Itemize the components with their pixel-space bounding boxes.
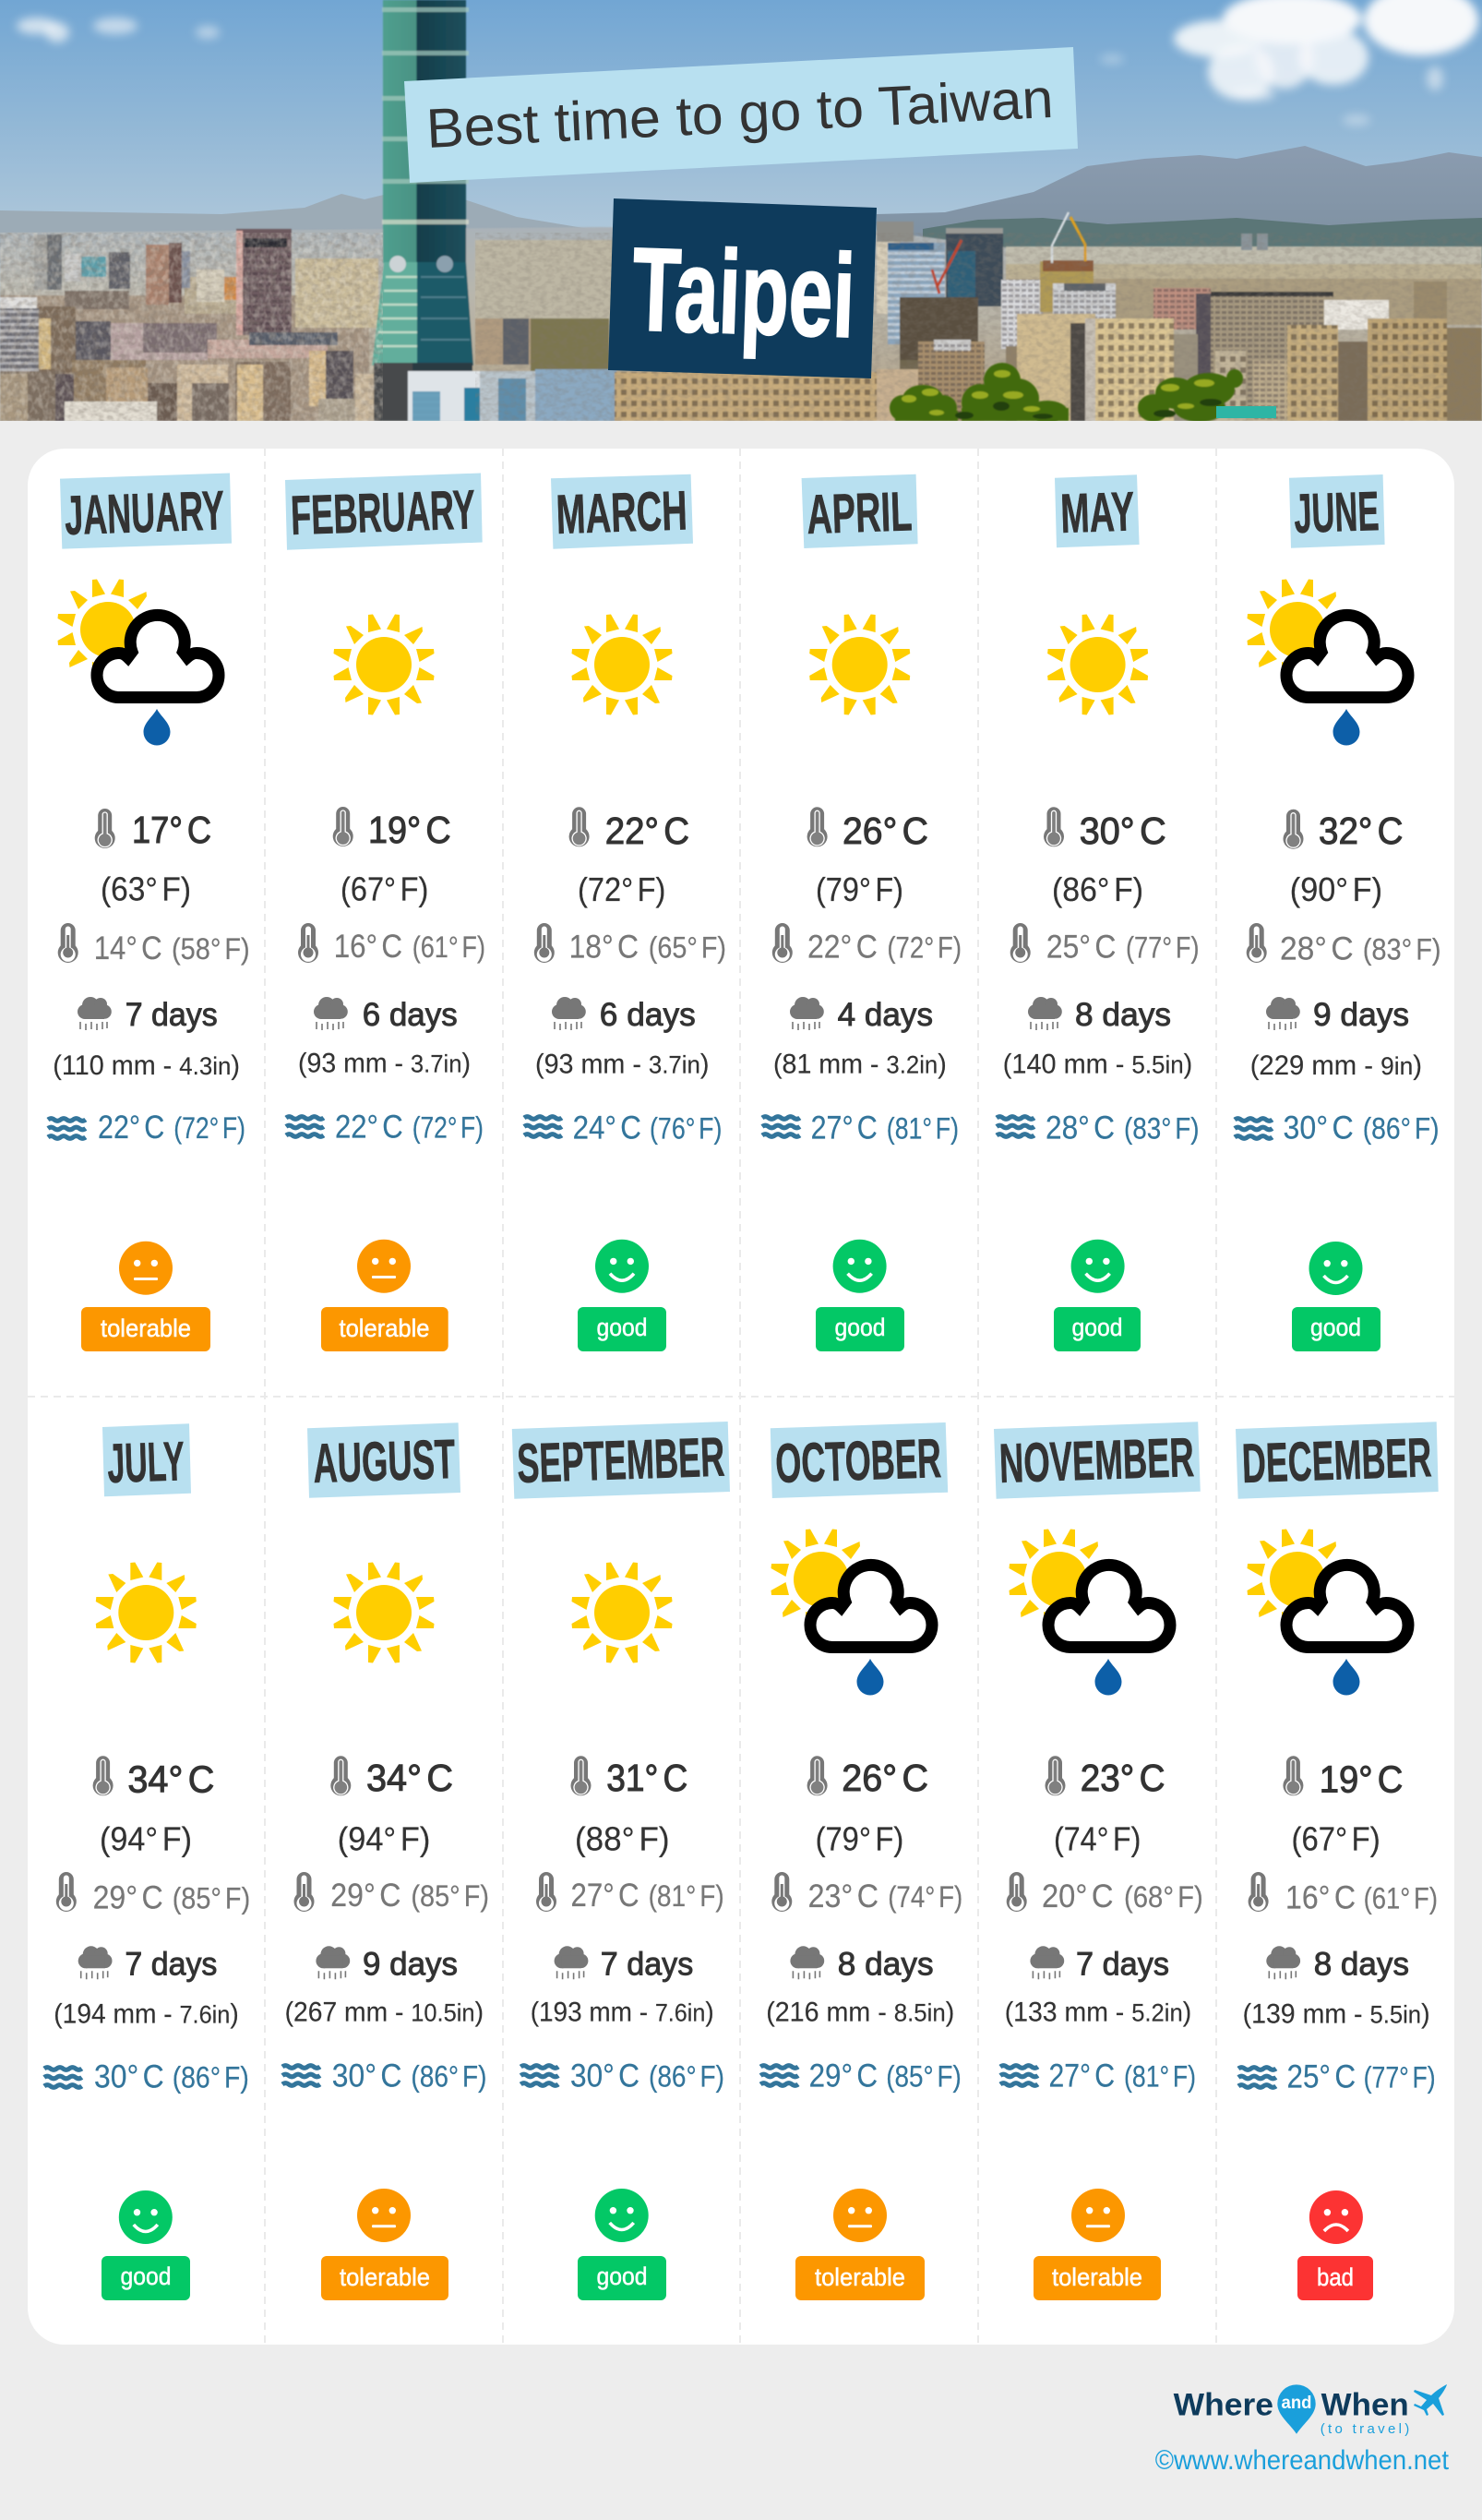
sea temperature: (86° F) (649, 2060, 724, 2094)
sea temperature: 27° C (811, 1110, 878, 1146)
logo: Where and When (to travel): Where (1174, 2388, 1273, 2423)
rain days: 8 days (1075, 997, 1171, 1033)
sea temperature: 22° C (335, 1110, 403, 1146)
rainfall: (216 mm - 8.5in) (766, 1998, 954, 2028)
low temperature: (58° F) (172, 932, 250, 966)
month label: March (551, 474, 693, 549)
low temperature (771, 1872, 962, 1914)
logo: Where and When (to travel): and (1281, 2394, 1312, 2413)
low temperature (1007, 1872, 1203, 1914)
banner: Taipei (608, 198, 877, 378)
cell: September (512, 1422, 730, 2300)
month label: May (1055, 474, 1140, 547)
sea temperature (286, 1110, 484, 1146)
month label: August (307, 1422, 460, 1498)
low temperature (1010, 923, 1200, 965)
high temperature: 26° C (842, 1757, 928, 1799)
sea temperature (524, 1110, 722, 1146)
high temperature: 26° C (843, 810, 928, 852)
panel: monthly weather card (28, 449, 1454, 2345)
high temperature in Fahrenheit: (67° F) (1292, 1819, 1380, 1857)
rainfall: (110 mm - 4.3in) (53, 1050, 240, 1081)
icon: sun (572, 615, 672, 714)
rain days (1030, 1946, 1169, 1982)
cell: June (1235, 474, 1441, 1351)
rain days (1028, 997, 1171, 1033)
high temperature (569, 807, 689, 852)
high temperature in Fahrenheit: (72° F) (578, 870, 665, 908)
icon: sun (572, 1562, 672, 1663)
sea temperature: (76° F) (650, 1111, 722, 1145)
rain days (314, 997, 458, 1033)
high temperature: 34° C (366, 1757, 453, 1799)
high temperature in Fahrenheit: (94° F) (100, 1819, 192, 1857)
rainfall: (229 mm - 9in) (1250, 1050, 1422, 1081)
high temperature (1045, 1756, 1165, 1799)
sea temperature (1000, 2058, 1196, 2094)
cell: August (282, 1422, 489, 2300)
high temperature (330, 1756, 453, 1799)
rain days: 7 days (125, 1946, 217, 1982)
low temperature: 22° C (807, 929, 878, 965)
sea temperature (762, 1110, 959, 1146)
rainfall: (93 mm - 3.7in) (535, 1049, 709, 1079)
month label: May: MAY (1059, 480, 1135, 545)
rain days: 9 days (1313, 997, 1409, 1033)
low temperature (772, 923, 962, 965)
high temperature (95, 809, 211, 851)
rating: tolerable: tolerable (1052, 2263, 1142, 2291)
cell: March (524, 474, 726, 1351)
copyright url: ©www.whereandwhen.net (1155, 2445, 1450, 2476)
rain days: 7 days (125, 997, 218, 1033)
low temperature: 28° C (1280, 930, 1354, 966)
rating: good: good (596, 2262, 648, 2290)
sea temperature: (72° F) (412, 1111, 484, 1145)
rating: good: good (1072, 1314, 1122, 1341)
rating: tolerable: tolerable (101, 1314, 191, 1342)
low temperature: (77° F) (1126, 930, 1200, 964)
icon: map pin (1277, 2384, 1316, 2434)
low temperature (536, 1872, 724, 1914)
banner: Taipei: Taipei (630, 223, 857, 363)
sea temperature: 24° C (573, 1110, 641, 1146)
rain days: 9 days (363, 1946, 458, 1982)
month label: November (994, 1422, 1201, 1499)
rainfall: (193 mm - 7.6in) (531, 1998, 714, 2028)
rain days (1266, 1946, 1409, 1982)
low temperature: 27° C (570, 1878, 639, 1914)
rain days (790, 1946, 934, 1982)
rainfall: (93 mm - 3.7in) (298, 1049, 471, 1079)
cell: February (285, 473, 485, 1351)
icon: sun and rain cloud (1248, 580, 1408, 746)
rain days: 8 days (1314, 1946, 1409, 1982)
sea temperature: (72° F) (173, 1111, 245, 1145)
rating: good (1054, 1240, 1141, 1351)
low temperature: 25° C (1046, 929, 1116, 965)
high temperature: 22° C (605, 810, 689, 852)
month label: January: JANUARY (64, 479, 225, 546)
icon: sun (334, 615, 434, 714)
high temperature (1283, 1756, 1403, 1801)
low temperature (298, 923, 485, 965)
rating: good: good (596, 1314, 648, 1341)
low temperature (56, 1872, 250, 1915)
icon: sun (334, 1562, 434, 1663)
rain days (1266, 997, 1409, 1033)
rating: good (578, 2189, 666, 2300)
sea temperature: (86° F) (1363, 1111, 1440, 1145)
sea temperature (282, 2058, 487, 2094)
rain days (316, 1946, 458, 1982)
cell: April (762, 474, 962, 1351)
rain days: 7 days (601, 1946, 693, 1982)
month label: September (512, 1422, 730, 1499)
cell: July (44, 1423, 250, 2300)
month label: June: JUNE (1293, 480, 1380, 545)
sea temperature: (81° F) (887, 1111, 959, 1145)
month label: April (802, 474, 918, 548)
cell: December (1236, 1422, 1439, 2300)
sea temperature: 27° C (1048, 2058, 1115, 2094)
month label: January (60, 473, 232, 549)
high temperature: 34° C (127, 1758, 214, 1801)
rating: tolerable (81, 1242, 210, 1351)
rating: good: good (1310, 1314, 1361, 1341)
rain days (78, 1946, 217, 1982)
sea temperature: (81° F) (1124, 2060, 1196, 2094)
month label: October: OCTOBER (774, 1427, 942, 1494)
sea temperature: 29° C (809, 2058, 878, 2094)
rain days: 7 days (1076, 1946, 1169, 1982)
low temperature: 29° C (330, 1878, 400, 1914)
high temperature in Fahrenheit: (86° F) (1052, 870, 1143, 908)
high temperature: 30° C (1080, 810, 1166, 852)
rating: good: good (834, 1314, 886, 1341)
low temperature: 14° C (94, 930, 162, 966)
low temperature: (61° F) (1364, 1882, 1438, 1915)
low temperature: (85° F) (411, 1879, 489, 1913)
rating: tolerable (795, 2189, 925, 2300)
high temperature in Fahrenheit: (67° F) (341, 870, 428, 908)
month label: July: JULY (106, 1430, 185, 1494)
trees (890, 363, 1243, 423)
low temperature: 16° C (334, 929, 402, 965)
icon: plane (1414, 2384, 1447, 2416)
high temperature in Fahrenheit: (88° F) (575, 1819, 670, 1857)
low temperature: 23° C (808, 1878, 878, 1914)
month label: September: SEPTEMBER (516, 1426, 725, 1494)
sea temperature (1238, 2059, 1436, 2095)
rain days: 6 days (600, 997, 696, 1033)
city grain (0, 233, 383, 421)
high temperature (93, 1756, 214, 1801)
sea temperature: 30° C (1283, 1110, 1354, 1146)
high temperature (333, 807, 451, 851)
logo: Where and When (to travel): (to travel) (1321, 2421, 1409, 2437)
hero photo: Taipei skyline (0, 0, 1482, 423)
rating: good (578, 1240, 666, 1351)
month label: June (1289, 474, 1385, 548)
rainfall: (133 mm - 5.2in) (1005, 1998, 1191, 2028)
rating: good: good (120, 2262, 172, 2290)
rainfall: (267 mm - 10.5in) (285, 1998, 484, 2028)
month label: November: NOVEMBER (998, 1426, 1195, 1494)
low temperature: (72° F) (887, 930, 962, 964)
icon: sun and rain cloud (771, 1529, 932, 1695)
sea temperature (520, 2058, 724, 2094)
rain days: 6 days (363, 997, 458, 1033)
high temperature: 17° C (132, 809, 211, 851)
rain days (552, 997, 696, 1033)
low temperature: (81° F) (649, 1879, 724, 1913)
low temperature: 16° C (1285, 1880, 1356, 1916)
low temperature: 20° C (1042, 1878, 1113, 1914)
rainfall: (140 mm - 5.5in) (1003, 1049, 1192, 1079)
sea temperature (1235, 1110, 1440, 1146)
sea temperature (44, 2059, 249, 2095)
low temperature: 18° C (569, 929, 639, 965)
sea temperature: 28° C (1046, 1110, 1115, 1146)
sea temperature: (86° F) (411, 2060, 487, 2094)
low temperature: (65° F) (649, 930, 726, 964)
rating: tolerable: tolerable (340, 1314, 430, 1342)
rating: good (1292, 1242, 1380, 1351)
icon: sun and rain cloud (1010, 1529, 1170, 1695)
high temperature in Fahrenheit: (74° F) (1054, 1819, 1141, 1857)
right towers (877, 242, 901, 314)
sea temperature: 30° C (332, 2058, 401, 2094)
icon: sun and rain cloud (57, 580, 219, 746)
icon: sun (1047, 615, 1148, 714)
rain days (790, 997, 933, 1033)
rain days (78, 997, 218, 1033)
cell: January (48, 473, 250, 1351)
rating: tolerable (321, 2189, 448, 2300)
low temperature (534, 923, 726, 965)
low temperature (1249, 1872, 1438, 1916)
sea temperature: 22° C (98, 1110, 164, 1146)
high temperature (1283, 810, 1403, 852)
rating: good (816, 1240, 904, 1351)
month label: March: MARCH (556, 479, 688, 546)
sea temperature (48, 1110, 245, 1146)
low temperature: (83° F) (1363, 932, 1441, 966)
low temperature: (85° F) (173, 1881, 250, 1914)
low temperature: (68° F) (1124, 1880, 1203, 1914)
low temperature: (61° F) (412, 930, 485, 964)
rainfall: (81 mm - 3.2in) (773, 1049, 947, 1079)
high temperature in Fahrenheit: (79° F) (816, 1819, 903, 1857)
logo: Where and When (to travel) (1174, 2384, 1447, 2437)
sea temperature: (83° F) (1124, 1111, 1200, 1145)
low temperature (1247, 923, 1441, 966)
high temperature: 31° C (606, 1757, 687, 1799)
rating: good (102, 2190, 190, 2300)
sea temperature: (77° F) (1364, 2061, 1436, 2094)
high temperature: 32° C (1319, 810, 1403, 852)
high temperature: 23° C (1081, 1757, 1165, 1799)
high temperature in Fahrenheit: (94° F) (338, 1819, 430, 1857)
month label: July (102, 1423, 191, 1496)
month label: August: AUGUST (312, 1428, 456, 1494)
icon: sun and rain cloud (1248, 1529, 1408, 1695)
rain days (555, 1946, 693, 1982)
rating: bad (1297, 2190, 1373, 2300)
sea temperature (760, 2058, 962, 2094)
rainfall: (139 mm - 5.5in) (1243, 1999, 1430, 2030)
high temperature: 19° C (1320, 1758, 1403, 1801)
low temperature (293, 1872, 489, 1914)
low temperature (58, 923, 250, 966)
left mid city (0, 295, 369, 421)
cell: October (760, 1422, 962, 2300)
high temperature (807, 1756, 928, 1799)
sea temperature: (85° F) (886, 2060, 962, 2094)
cell: May (997, 474, 1200, 1351)
rainfall: (194 mm - 7.6in) (54, 1999, 239, 2030)
rating: tolerable: tolerable (815, 2263, 905, 2291)
sea temperature: (86° F) (173, 2061, 249, 2094)
rating: tolerable (1034, 2189, 1161, 2300)
high temperature: 19° C (368, 809, 451, 851)
cell: November (994, 1422, 1203, 2300)
logo: Where and When (to travel): When (1321, 2388, 1409, 2423)
high temperature (807, 807, 928, 852)
rating: tolerable (321, 1240, 448, 1351)
rain days: 4 days (838, 997, 933, 1033)
month label: October (771, 1422, 948, 1498)
high temperature in Fahrenheit: (79° F) (816, 870, 903, 908)
Taipei 101 (383, 0, 466, 263)
high temperature in Fahrenheit: (90° F) (1290, 870, 1382, 908)
sea temperature: 30° C (94, 2059, 164, 2095)
sea temperature: 30° C (570, 2058, 639, 2094)
banner: Best time to go to Taiwan: Best time to go to Taiwan (424, 67, 1055, 160)
high temperature in Fahrenheit: (63° F) (101, 870, 191, 908)
icon: sun (96, 1562, 197, 1663)
sea temperature: 25° C (1286, 2059, 1356, 2095)
month label: February: FEBRUARY (290, 478, 476, 546)
high temperature (570, 1756, 687, 1799)
rating: tolerable: tolerable (340, 2263, 430, 2291)
banner: Best time to go to Taiwan (404, 47, 1078, 183)
month label: February (285, 473, 483, 550)
low temperature: (74° F) (888, 1880, 962, 1914)
icon: sun (809, 615, 910, 714)
sea temperature (997, 1110, 1200, 1146)
low temperature: 29° C (93, 1879, 163, 1915)
rain days: 8 days (838, 1946, 934, 1982)
high temperature (1044, 807, 1166, 852)
month label: April: APRIL (806, 480, 913, 546)
rating: bad: bad (1317, 2263, 1354, 2291)
